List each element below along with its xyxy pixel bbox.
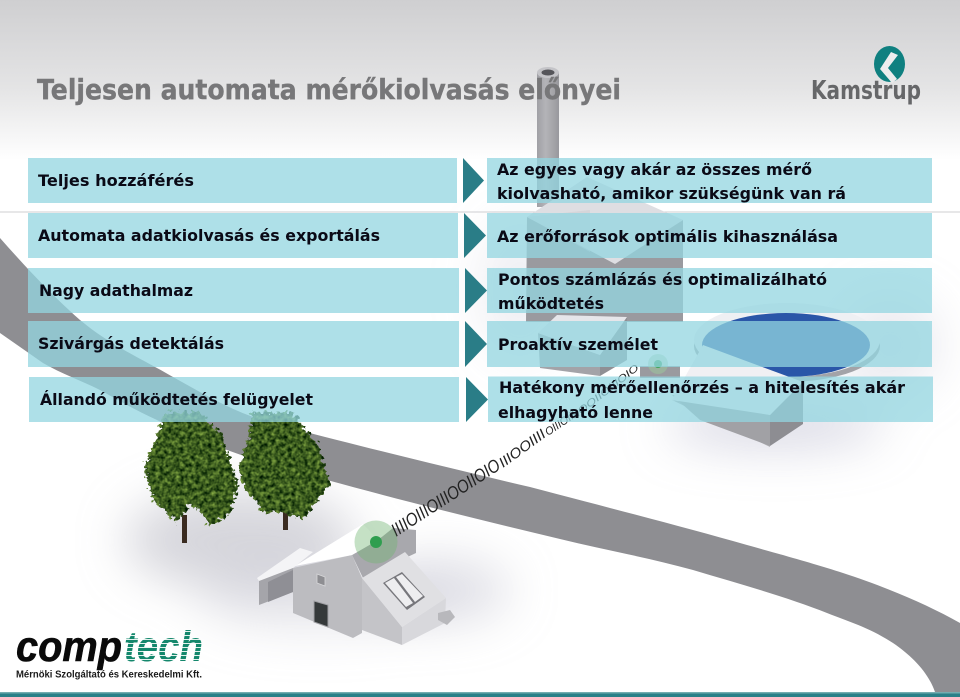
logo: comptech: comp (16, 623, 122, 671)
window (317, 574, 325, 586)
row 4: Proaktív személet (498, 335, 658, 354)
row 3 (28, 268, 932, 313)
row 5: elhagyható lenne (498, 403, 653, 422)
binary data stream: IOOIIOIIIOIO (573, 362, 642, 419)
sloped roof (362, 552, 446, 627)
building: small block (538, 315, 627, 376)
building: large block (526, 177, 683, 322)
row 2: Az erőforrások optimális kihasználása (497, 227, 838, 246)
row 3: Pontos számlázás és optimalizálható (498, 270, 827, 289)
gable walls (362, 578, 402, 645)
small valve point (640, 354, 680, 378)
row 1: kiolvasható, amikor szükségünk van rá (497, 184, 846, 203)
row 2: Automata adatkiolvasás és exportálás (38, 226, 380, 245)
row 1 (28, 158, 932, 203)
binary data stream: IIIOOIIII (495, 426, 549, 470)
building: front block (672, 345, 803, 447)
row 4 (28, 321, 932, 367)
garage (257, 548, 313, 605)
house with solar panels (257, 524, 455, 645)
logo: Kamstrup: Kamstrup (811, 76, 921, 106)
solar panels (383, 572, 425, 610)
title: Teljesen automata mérőkiolvasás előnyei (37, 74, 621, 106)
tree left (144, 412, 238, 543)
binary data stream: OIIIOIII (543, 409, 579, 438)
ground shadows (125, 220, 940, 630)
outdoor unit (438, 610, 455, 625)
row 5: Állandó működtetés felügyelet (40, 390, 313, 409)
tree right (238, 412, 330, 530)
door (314, 601, 328, 627)
water tank pool (694, 303, 880, 382)
bottom bar (0, 692, 960, 697)
logo: comptech (16, 623, 203, 680)
row 1: Az egyes vagy akár az összes mérő (497, 160, 812, 179)
row 5 (29, 376, 933, 422)
chimney pipe (537, 67, 559, 207)
row 3: Nagy adathalmaz (39, 281, 193, 300)
row 3: működtetés (498, 294, 604, 313)
row 1: Teljes hozzáférés (38, 171, 194, 190)
binary data stream: IIIIOIIIOIIIOOIIOIO (387, 455, 504, 540)
header gradient (0, 0, 960, 160)
logo: Kamstrup (811, 46, 921, 106)
row 5: Hatékony mérőellenőrzés – a hitelesítés akár (499, 378, 905, 397)
logo: comptech: tech (124, 623, 203, 671)
white roof (295, 524, 378, 566)
radio transmitter (354, 520, 398, 564)
row 2 (28, 213, 932, 258)
row 4: Szivárgás detektálás (38, 334, 224, 353)
main wall (293, 555, 362, 638)
rear wall (352, 528, 416, 578)
logo: comptech: Mérnöki Szolgáltató és Kereskedelmi Kft. (16, 668, 202, 680)
road (0, 238, 960, 692)
binary data stream (387, 362, 642, 540)
